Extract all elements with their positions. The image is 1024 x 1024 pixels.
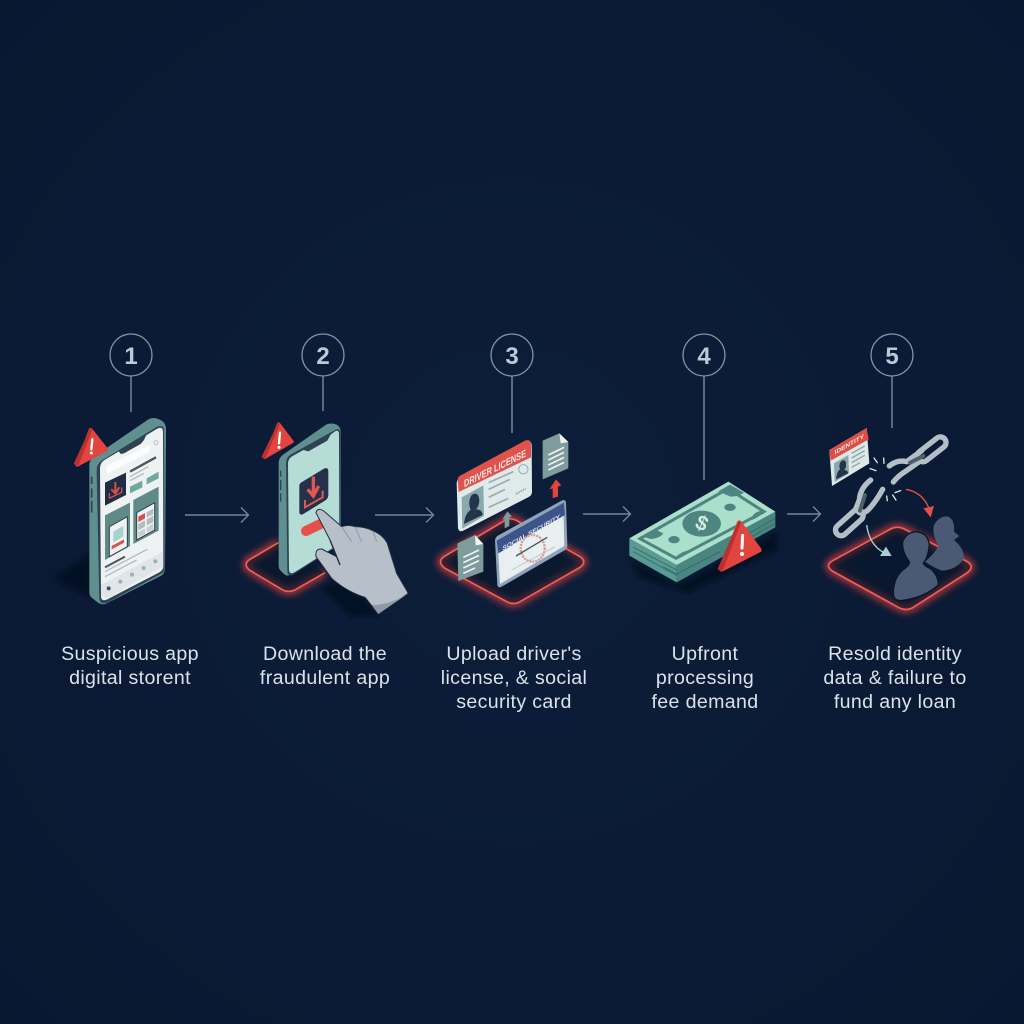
step 3: number badge: 3 — [505, 343, 519, 370]
step 2: number badge — [302, 334, 344, 411]
step 5: broken chain illustration — [828, 428, 971, 609]
red up arrow — [549, 479, 561, 498]
step 3: caption: license, & social — [441, 667, 587, 689]
red glowing platform 2 — [246, 543, 325, 591]
alert triangle 1 — [75, 430, 106, 465]
download icon — [299, 468, 328, 515]
alert triangle 2 — [263, 424, 292, 457]
arrow 3 to 4 — [583, 506, 630, 522]
step 3: caption: security card — [456, 691, 572, 713]
step 3: caption — [441, 643, 587, 713]
lower chain — [833, 480, 883, 538]
step 5: caption — [823, 643, 967, 713]
step 1: caption: digital storent — [69, 667, 191, 689]
alert triangle 4 — [719, 523, 759, 569]
social security card: SOCIAL SECURITY — [503, 514, 560, 553]
step 1: number badge — [110, 334, 152, 412]
phone 1 screen contents — [101, 441, 163, 598]
break sparks — [870, 458, 901, 501]
document top right — [543, 433, 568, 479]
step 1: caption — [61, 643, 199, 689]
step 3: caption: Upload driver's — [446, 643, 582, 665]
document bottom left — [457, 535, 483, 581]
silhouette back — [925, 516, 964, 571]
step 3: number badge — [491, 334, 533, 433]
silhouette front — [893, 532, 938, 601]
arrow 1 to 2 — [185, 508, 248, 522]
step 4: number badge: 4 — [697, 343, 711, 370]
step 2: caption — [260, 643, 390, 689]
red glowing platform 3 — [440, 519, 584, 603]
cash stack: $ — [692, 511, 712, 537]
red button — [306, 523, 322, 531]
identity card: IDENTITY — [835, 433, 865, 457]
red glowing platform 5 — [828, 527, 971, 609]
step 2: caption: Download the — [263, 643, 387, 665]
step 3: documents illustration — [440, 433, 584, 603]
step 2: number badge: 2 — [316, 343, 330, 370]
teal curved arrow — [867, 525, 892, 556]
step 2: caption: fraudulent app — [260, 667, 390, 689]
step 4: money stack illustration — [629, 482, 777, 593]
identity card — [829, 428, 869, 486]
step 5: caption: Resold identity — [828, 643, 962, 665]
red curved arrow — [906, 489, 934, 517]
step 4: caption: Upfront — [672, 643, 739, 665]
step 4: caption: processing — [656, 667, 754, 689]
step 1: phone app store illustration — [53, 418, 166, 604]
step 5: caption: data & failure to — [823, 667, 967, 689]
phone 2 body — [279, 423, 341, 576]
teal up arrow — [502, 511, 512, 528]
step 5: number badge: 5 — [885, 343, 899, 370]
step 5: number badge — [871, 334, 913, 428]
arrow 4 to 5 — [787, 506, 820, 522]
social security card — [495, 500, 567, 587]
step 1: caption: Suspicious app — [61, 643, 199, 665]
hand — [316, 509, 408, 614]
arrow 2 to 3 — [375, 508, 434, 522]
upper chain — [889, 435, 948, 482]
step 5: caption: fund any loan — [834, 691, 956, 713]
step 1: number badge: 1 — [124, 343, 138, 370]
step 4: caption — [652, 643, 758, 713]
step 2: download illustration — [246, 423, 408, 617]
step 4: number badge — [683, 334, 725, 480]
step 4: caption: fee demand — [652, 691, 758, 713]
cash stack — [629, 482, 775, 582]
driver license card: DRIVER LICENSE — [464, 448, 526, 490]
driver license card — [457, 440, 532, 531]
